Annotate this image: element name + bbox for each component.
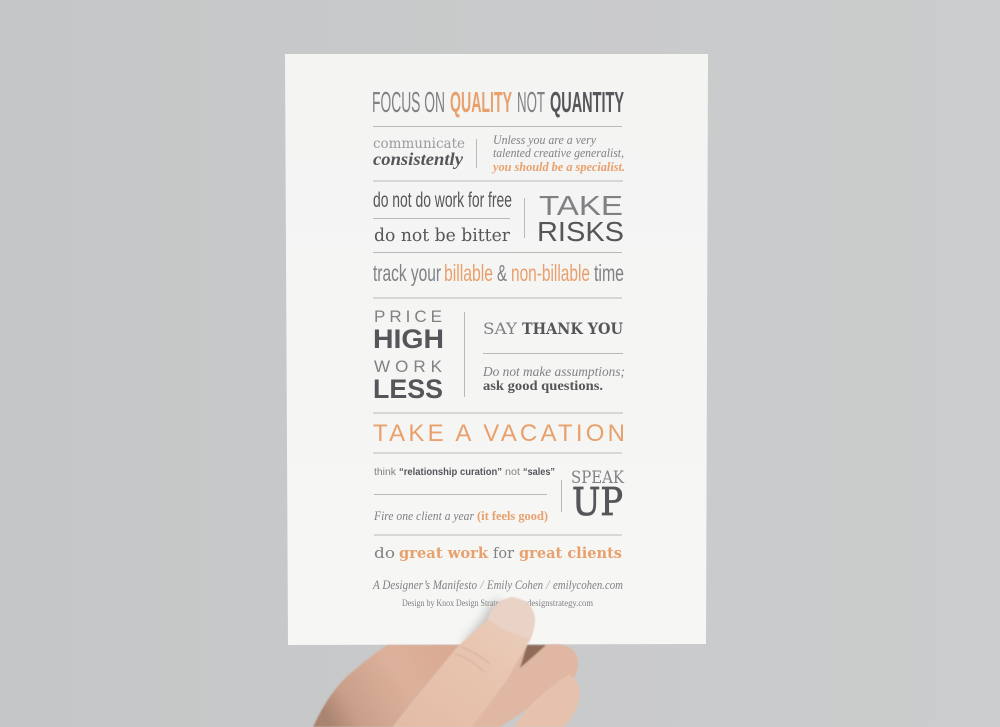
heading: focus on quality not quantity [372,87,624,119]
knuckle wrinkles [455,647,490,672]
footer credit: A Designer’s Manifesto [372,577,477,592]
manifesto content: QUANTITY [550,87,624,119]
footer credit: Emily Cohen [486,577,543,592]
block: communicate consistently: talented creative generalist, [493,145,624,160]
callout: take risks [537,190,624,247]
block: do not do work for free, do not be bitter: do not be bitter [374,225,510,246]
block: do not make assumptions [482,365,625,394]
manifesto content [372,87,625,608]
block: say thank you [483,319,623,338]
callout: take risks: RISKS [537,216,624,247]
line: relationship curation not sales [374,467,555,478]
design credit: Design by Knox Design Strategy [402,598,507,608]
thumbnail [488,598,534,638]
line: relationship curation not sales: “relationship curation” [399,467,502,478]
block: communicate consistently: communicate [373,136,465,152]
design credit: knoxdesignstrategy.com [510,598,593,608]
block: communicate consistently [373,132,625,174]
design credit [402,598,593,608]
callout: take risks: TAKE [539,190,623,221]
palm crease [383,679,411,705]
line: do great work for great clients [374,544,622,562]
block: communicate consistently: consistently [373,149,464,169]
line: track your billable and non-billable time: non-billable [511,260,590,286]
line: relationship curation not sales: think [374,467,397,478]
block: communicate consistently: Unless you are a very [493,132,596,147]
line: relationship curation not sales: “sales” [523,467,555,478]
heading: focus on quality not quantity: NOT [517,87,545,119]
footer credit: / [545,577,551,592]
line: track your billable and non-billable time [373,260,624,286]
line: fire one client a year: Fire one client a year [373,508,475,523]
line: fire one client a year: (it feels good) [477,508,548,523]
block: say thank you: SAY [483,319,517,338]
block: price high work less: LESS [373,374,443,404]
block: price high work less: WORK [374,357,443,376]
thumb [393,597,535,727]
heading: focus on quality not quantity: QUALITY [450,87,512,119]
line: track your billable and non-billable time: billable [444,260,493,286]
block: price high work less: PRICE [374,307,442,326]
paper card [285,54,708,645]
footer credit: / [479,577,485,592]
block: price high work less: HIGH [373,324,444,354]
line: track your billable and non-billable time: & [497,260,507,286]
heading: focus on quality not quantity: FOCUS ON [372,87,445,119]
banner: take a vacation: TAKE A VACATION [373,420,625,447]
line: do great work for great clients: for [493,544,515,562]
callout: speak up: UP [572,480,623,524]
block: do not make assumptions: ask good questions. [483,379,603,394]
line: fire one client a year [373,508,548,523]
line: track your billable and non-billable time: track your [373,260,441,286]
line: do great work for great clients: do [374,544,395,562]
block: say thank you: THANK YOU [522,319,623,338]
block: communicate consistently: you should be a specialist. [491,159,625,174]
footer credit [372,577,623,592]
line: do great work for great clients: great clients [519,544,622,562]
back fingers [313,644,580,727]
block: price high work less [373,307,444,404]
block: do not do work for free, do not be bitter [373,189,512,246]
block: do not do work for free, do not be bitter: do not do work for free [373,189,512,212]
line: track your billable and non-billable time: time [594,260,624,286]
hand [313,597,580,727]
callout: speak up: SPEAK [571,468,624,488]
line: relationship curation not sales: not [505,467,520,478]
block: do not make assumptions: Do not make assumptions; [482,365,625,380]
thumb shadow on paper [462,600,500,645]
footer credit: emilycohen.com [553,577,623,592]
line: do great work for great clients: great work [399,544,489,562]
